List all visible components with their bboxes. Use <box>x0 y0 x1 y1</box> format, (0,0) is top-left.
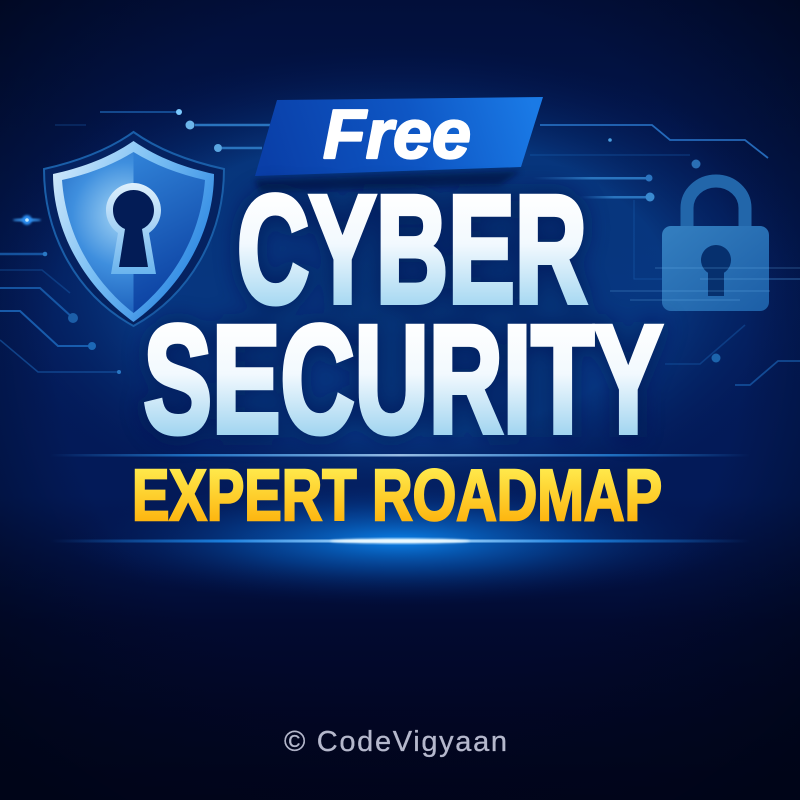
title <box>144 164 662 465</box>
subtitle: EXPERT ROADMAP <box>132 456 662 536</box>
badge shadow <box>255 171 521 192</box>
shield left face <box>62 152 134 313</box>
footer credit: © CodeVigyaan <box>284 726 507 758</box>
badge: Free <box>255 95 543 192</box>
icon: shield <box>44 132 224 326</box>
circuit lines left <box>0 109 270 374</box>
shield right face <box>134 152 205 313</box>
title shadow: CYBER <box>237 164 587 335</box>
title line: CYBER: CYBER <box>237 164 587 335</box>
badge label: Free <box>323 95 471 173</box>
shield outer outline <box>44 132 224 326</box>
title shadow <box>144 164 662 465</box>
divider bottom with glow <box>40 470 760 610</box>
icon: padlock <box>610 181 800 311</box>
shield rim <box>53 141 214 322</box>
divider top <box>50 454 750 456</box>
badge ribbon <box>255 97 543 176</box>
spark left <box>13 215 41 225</box>
circuit lines right <box>530 125 800 385</box>
padlock body <box>662 226 769 311</box>
shield keyhole <box>106 183 161 274</box>
padlock keyhole <box>701 245 731 296</box>
padlock shackle <box>687 181 745 226</box>
padlock light streaks <box>610 268 800 300</box>
